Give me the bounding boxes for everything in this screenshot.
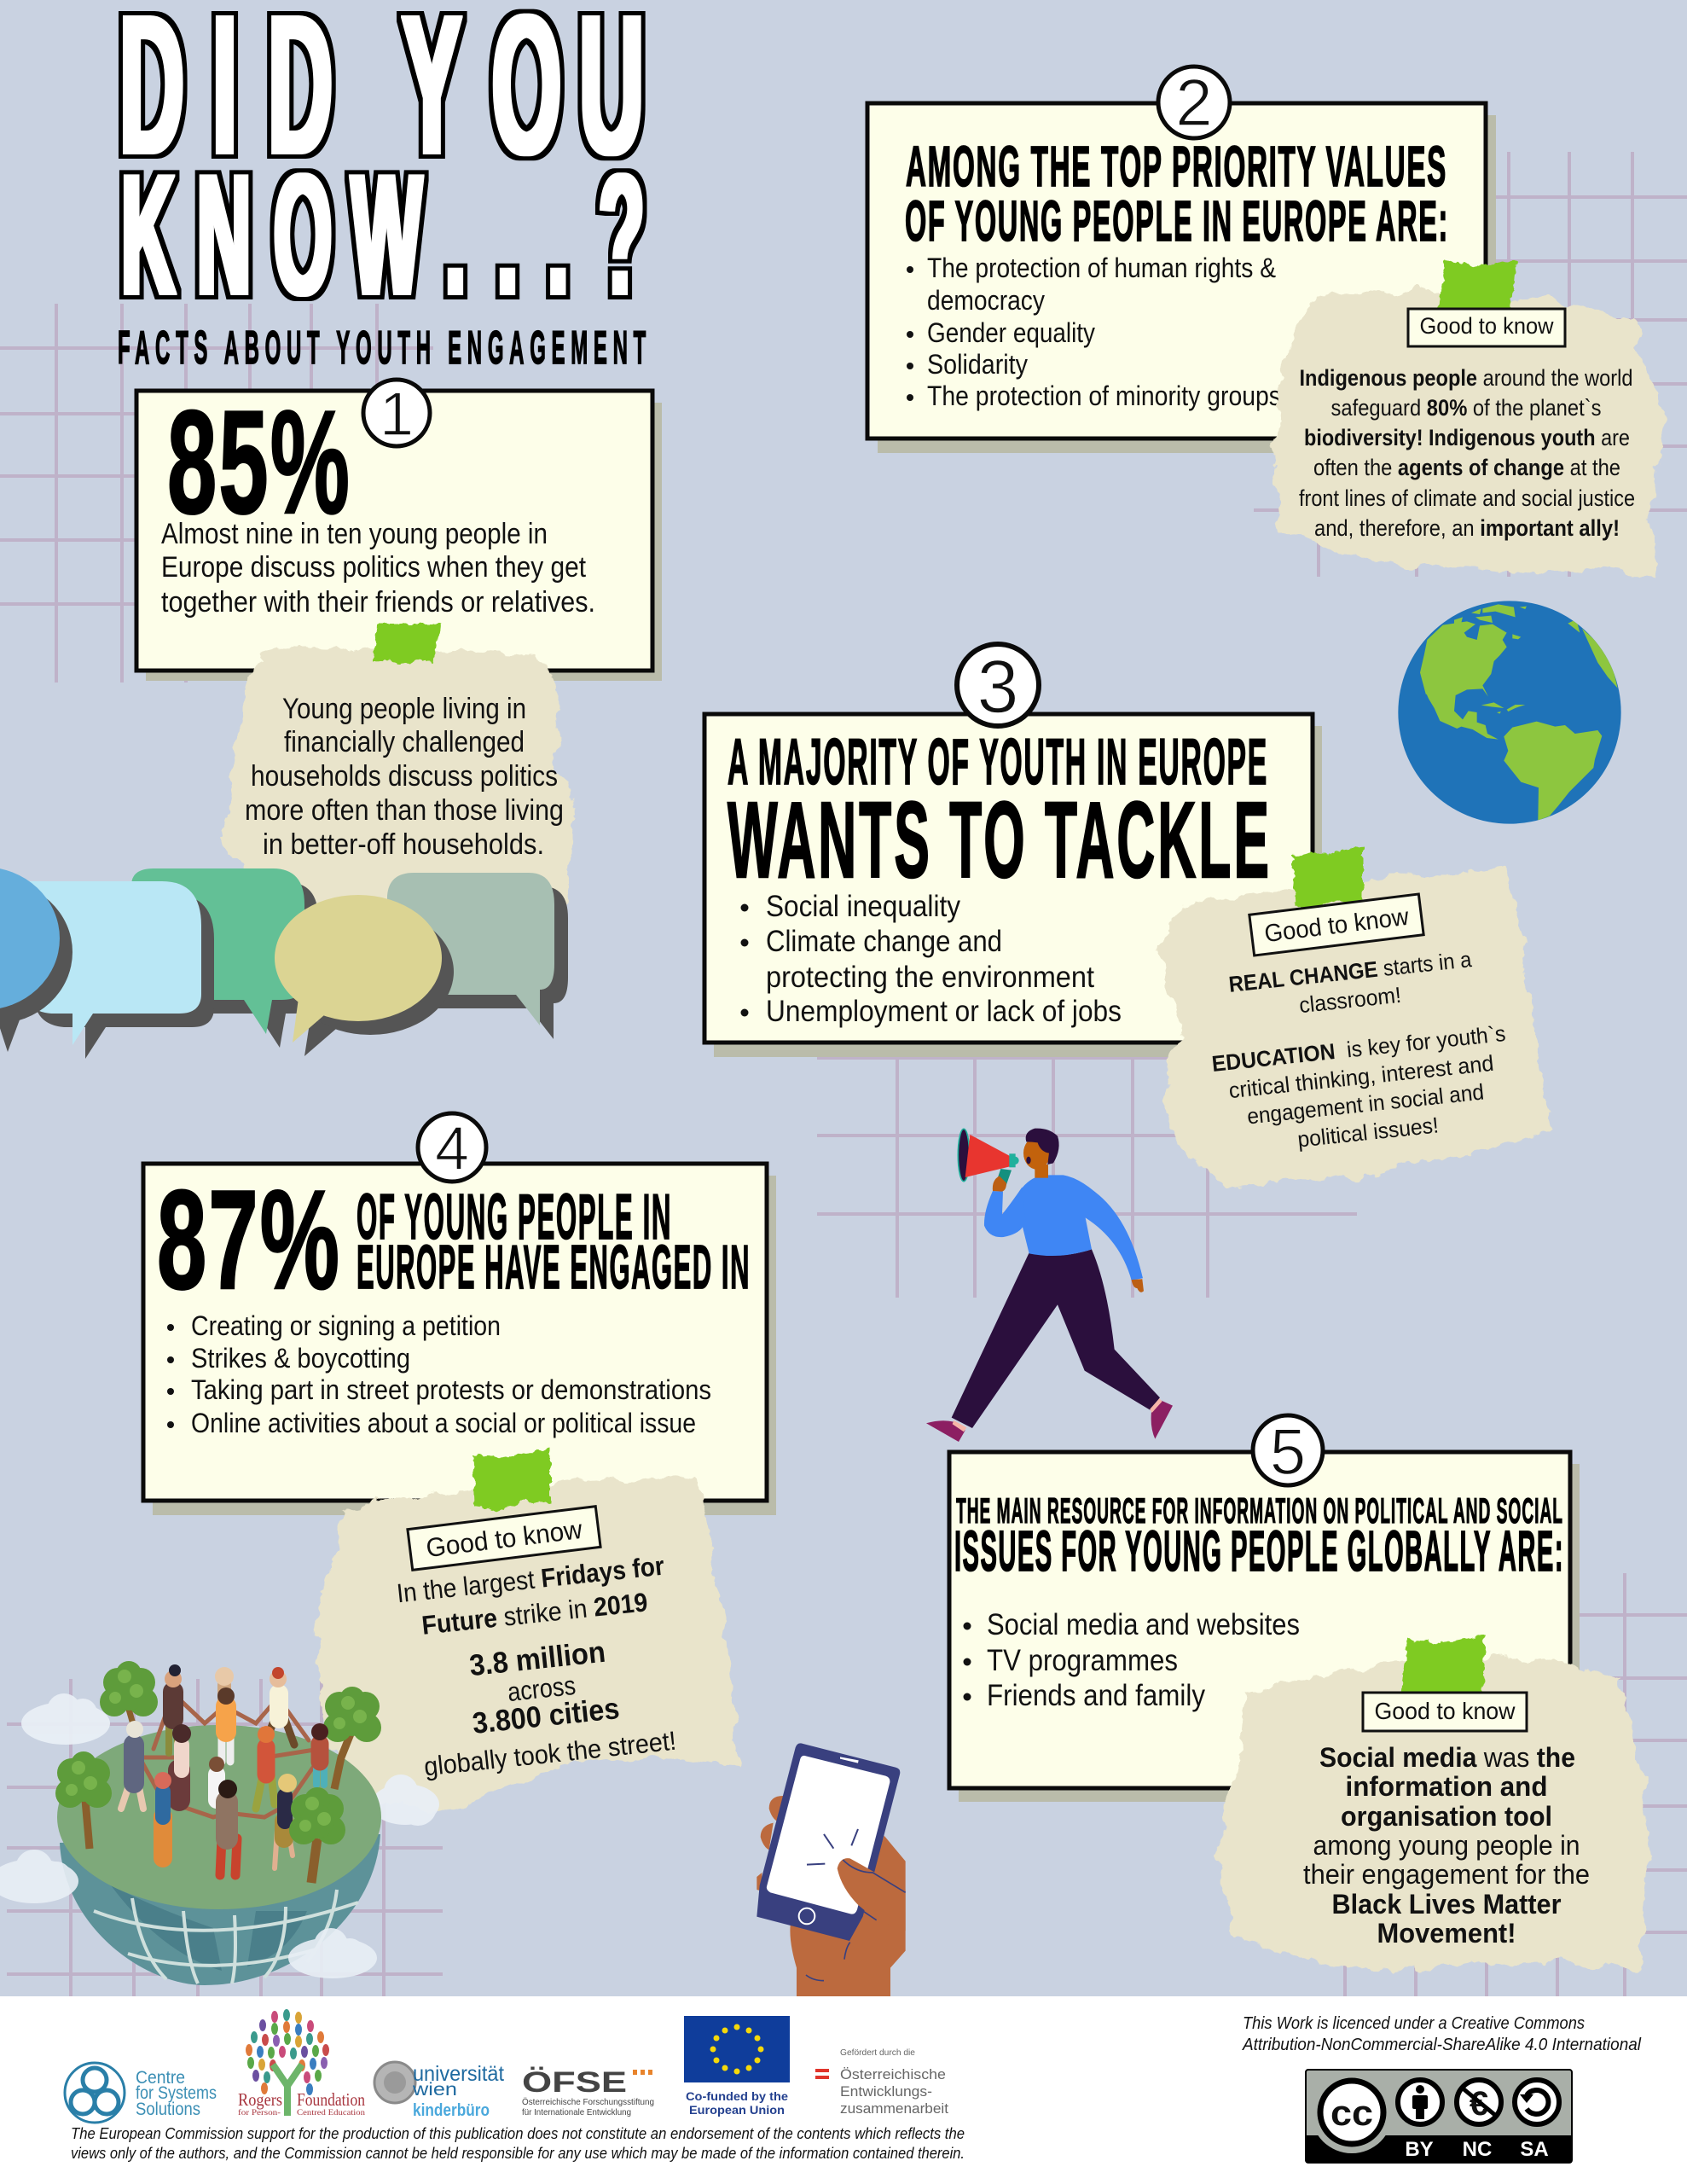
Creative Commons BY-NC-SA badge: NC (1463, 2138, 1492, 2161)
clouds behind (21, 1693, 439, 1826)
front trees (55, 1751, 345, 1883)
panel 2 list: The protection of human rights & (927, 253, 1276, 283)
panel 4 list: Taking part in street protests or demonstrations (191, 1374, 711, 1405)
green tape (1438, 260, 1516, 311)
note text: and, therefore, an important ally! (1314, 515, 1620, 541)
number badge 3 (957, 644, 1039, 729)
note text: households discuss politics (251, 760, 558, 793)
panel 4 list: Online activities about a social or political issue (191, 1408, 696, 1438)
number badge 2: 2 (1175, 65, 1213, 140)
licence text (1242, 2014, 1642, 2054)
panel 2: top priority values (867, 65, 1496, 453)
dancers (121, 1664, 328, 1875)
note text: among young people in (1313, 1830, 1580, 1861)
logo: Austrian Development Cooperation: Österreichische (840, 2066, 946, 2082)
note text: Black Lives Matter (1332, 1889, 1561, 1920)
disclaimer text: The European Commission support for the production of this publication does not constitute an endorsement of the contents which reflects the (71, 2125, 965, 2142)
panel 3 list: protecting the environment (766, 961, 1094, 994)
clouds in front (0, 1850, 377, 1978)
panel 2 list: democracy (927, 285, 1045, 316)
note paper 1 (220, 624, 573, 926)
speech bubbles (0, 867, 568, 1059)
note text: front lines of climate and social justice (1299, 485, 1635, 511)
panel 1 text (161, 518, 595, 619)
note text: classroom! (1298, 982, 1402, 1018)
note text: engagement in social and (1246, 1079, 1485, 1129)
panel 1 text: Europe discuss politics when they get (161, 551, 586, 584)
panel 4 list: Strikes & boycotting (191, 1343, 410, 1374)
number badge 5: 5 (1270, 1416, 1306, 1489)
licence text: Attribution-NonCommercial-ShareAlike 4.0 International (1242, 2036, 1642, 2054)
note text: Indigenous people around the world (1300, 365, 1632, 391)
logo: EU flag co-funded: European Union (689, 2103, 785, 2117)
illustration: people in a circle on a globe (0, 1661, 439, 1985)
panel 5 list: Friends and family (987, 1679, 1205, 1712)
logo: OFSE (522, 2066, 654, 2117)
logo: Rogers Foundation: for Person- (238, 2108, 281, 2117)
note text: more often than those living (245, 794, 564, 827)
panel 4 heading (357, 1181, 751, 1302)
icon: globe (1398, 601, 1621, 824)
back trees (100, 1661, 381, 1789)
panel 1 text: Almost nine in ten young people in (161, 518, 548, 550)
panel 5: main resource for information (949, 1415, 1580, 1802)
note text: in better-off households. (263, 828, 544, 861)
note text: their engagement for the (1303, 1859, 1590, 1890)
number badge 1 (363, 380, 430, 449)
logo: Austrian Development Cooperation: Gefördert durch die (840, 2048, 915, 2058)
panel 3 list: Unemployment or lack of jobs (766, 995, 1122, 1028)
statistic 85%: 85% (167, 380, 351, 544)
panel 5 heading (954, 1490, 1564, 1583)
number badge 3: 3 (977, 644, 1018, 729)
panel 5 list: TV programmes (987, 1644, 1178, 1677)
note text: Young people living in (282, 693, 526, 725)
logo: OFSE: für Internationale Entwicklung (522, 2107, 631, 2117)
green tape (473, 1448, 550, 1511)
note text: 3.800 cities (471, 1692, 621, 1740)
logo: Rogers Foundation: Foundation (297, 2089, 365, 2110)
number badge 2 (1158, 65, 1230, 140)
Creative Commons BY-NC-SA badge: BY (1405, 2138, 1434, 2161)
panel 3 list: Climate change and (766, 925, 1002, 958)
logo: Rogers Foundation: Centred Education (297, 2108, 366, 2117)
note text: information and (1346, 1771, 1547, 1802)
panel 1: 85 percent (136, 380, 662, 681)
note text: financially challenged (284, 726, 525, 758)
number badge 1: 1 (380, 380, 414, 449)
text: FACTS ABOUT YOUTH ENGAGEMENT (118, 321, 652, 374)
panel 4 heading: OF YOUNG PEOPLE IN (357, 1181, 672, 1252)
panel 3 list (740, 890, 1122, 1028)
note paper 3 (1156, 846, 1552, 1188)
note paper 4 (315, 1448, 738, 1810)
panel 4: 87 percent (143, 1113, 776, 1515)
note text: Social media was the (1319, 1742, 1575, 1773)
note text: political issues! (1296, 1112, 1440, 1153)
note text: organisation tool (1341, 1801, 1552, 1832)
illustration: hand holding a phone (757, 1743, 906, 1996)
good to know label (408, 1507, 600, 1570)
note text: across (506, 1670, 577, 1707)
Creative Commons BY-NC-SA badge: SA (1520, 2138, 1549, 2161)
logo: Universität Wien Kinderbüro: kinderbüro (413, 2101, 490, 2120)
panel 5 list: Social media and websites (987, 1608, 1300, 1641)
panel 4 list (167, 1310, 711, 1438)
logo: Rogers Foundation (238, 2009, 366, 2117)
logo: EU flag co-funded (684, 2016, 790, 2117)
Creative Commons BY-NC-SA badge (1306, 2070, 1572, 2163)
logo: Austrian Development Cooperation: zusammenarbeit (840, 2100, 948, 2117)
panel 2 list: Gender equality (927, 317, 1095, 348)
note text: globally took the street! (422, 1726, 677, 1781)
panel 3 list: Social inequality (766, 890, 960, 923)
statistic 87%: 87% (157, 1161, 341, 1318)
logo: Universität Wien Kinderbüro: universität (413, 2062, 504, 2086)
good to know label: Good to know (425, 1514, 584, 1563)
panel 5 list (964, 1608, 1300, 1712)
note text: Movement! (1377, 1918, 1516, 1949)
note text (1299, 365, 1635, 541)
note text: REAL CHANGE starts in a (1227, 946, 1473, 997)
note text: often the agents of change at the (1313, 455, 1620, 480)
note text: Future strike in 2019 (420, 1587, 649, 1641)
note text (1210, 946, 1507, 1153)
logo: EU flag co-funded: Co-funded by the (686, 2089, 788, 2103)
note text: In the largest Fridays for (395, 1551, 665, 1608)
Creative Commons BY-NC-SA badge: cc (1330, 2093, 1373, 2133)
note text (245, 693, 564, 861)
panel 3: majority wants to tackle (704, 644, 1322, 1057)
panel 2 list: Solidarity (927, 349, 1028, 380)
good to know label: Good to know (1263, 903, 1411, 948)
note paper 5 (1215, 1635, 1652, 1971)
note paper 2 (1271, 260, 1667, 577)
note text (1303, 1742, 1590, 1949)
title: Did you know: KNOW...? (121, 138, 645, 332)
green tape (373, 624, 440, 665)
number badge 4: 4 (435, 1115, 469, 1183)
green tape (1401, 1635, 1485, 1693)
green disc (57, 1725, 381, 1909)
note text: 3.8 million (467, 1635, 607, 1682)
footer (0, 1996, 1687, 2184)
good to know label: Good to know (1419, 313, 1554, 339)
good to know label (1408, 309, 1565, 346)
note text: critical thinking, interest and (1227, 1050, 1495, 1103)
panel 2 heading (905, 135, 1449, 253)
panel 2 list (907, 253, 1281, 411)
text: EUROPE HAVE ENGAGED IN (357, 1234, 751, 1302)
note text: biodiversity! Indigenous youth are (1304, 425, 1630, 450)
good to know label: Good to know (1375, 1698, 1516, 1724)
panel 2 list: The protection of minority groups (927, 380, 1281, 411)
title: Did you know (119, 0, 645, 332)
panel 1 text: together with their friends or relatives. (161, 586, 595, 619)
logo: Austrian Development Cooperation (815, 2048, 948, 2117)
logo: OFSE: Österreichische Forschungsstiftung (522, 2097, 654, 2107)
logo: OFSE: ÖFSE (522, 2066, 627, 2099)
disclaimer text (71, 2125, 965, 2162)
good to know label (1249, 894, 1423, 956)
note text: safeguard 80% of the planet`s (1330, 395, 1602, 421)
logo: Centre for Systems Solutions (65, 2063, 217, 2123)
number badge 5 (1253, 1415, 1323, 1489)
logo: Rogers Foundation: Rogers (238, 2089, 282, 2110)
illustration: person with megaphone (926, 1129, 1173, 1442)
Creative Commons BY-NC-SA badge: € (1470, 2085, 1488, 2123)
logo: Universität Wien Kinderbüro (374, 2062, 504, 2120)
hemisphere (60, 1834, 380, 1985)
logo: Universität Wien Kinderbüro: wien (412, 2080, 457, 2100)
disclaimer text: views only of the authors, and the Commission cannot be held responsible for any use which may be made of the information contained therein. (71, 2145, 965, 2162)
logo: Centre for Systems Solutions: Centre (136, 2068, 185, 2088)
green tape (1292, 846, 1363, 909)
good to know label (1363, 1693, 1527, 1731)
licence text: This Work is licenced under a Creative Commons (1243, 2014, 1585, 2033)
logo: Centre for Systems Solutions: Solutions (136, 2100, 200, 2119)
logo: Austrian Development Cooperation: Entwicklungs- (840, 2083, 932, 2100)
panel 3 heading (728, 726, 1272, 900)
note text (395, 1551, 677, 1781)
note text: EDUCATION is key for youth`s (1210, 1020, 1507, 1077)
logo: Centre for Systems Solutions: for Systems (136, 2083, 217, 2103)
panel 4 list: Creating or signing a petition (191, 1310, 501, 1341)
number badge 4 (418, 1113, 486, 1183)
